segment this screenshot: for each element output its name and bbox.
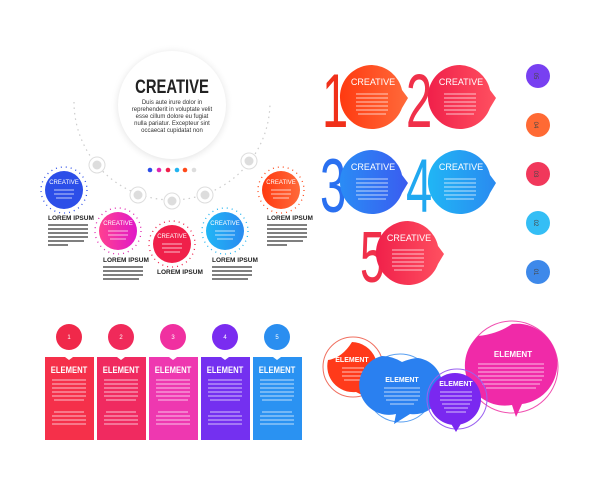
labels: LOREM IPSUM (103, 257, 149, 264)
main white circle: Duis aute irure dolor in (142, 100, 202, 106)
labels (48, 215, 313, 276)
number 1 bubble: CREATIVE (351, 77, 395, 87)
blue bubble: ELEMENT (385, 377, 419, 384)
main white circle: nulla pariatur. Excepteur sint (134, 121, 210, 127)
step circles (41, 167, 304, 267)
main white circle (110, 44, 234, 168)
panel: element speech circles (323, 321, 558, 432)
number 2 bubble: CREATIVE (439, 77, 483, 87)
number 2 bubble: 2 (406, 60, 432, 144)
panel: vertical number dots: 02 (532, 220, 538, 227)
number 1 bubble (322, 60, 408, 144)
number 3 bubble: CREATIVE (351, 162, 395, 172)
panel: vertical number dots: 01 (532, 269, 538, 276)
number 4 bubble (406, 145, 496, 229)
step circles: CREATIVE (103, 221, 133, 227)
step circles: CREATIVE (210, 221, 240, 227)
main white circle: CREATIVE (135, 76, 209, 97)
panel: element cards: ELEMENT (155, 364, 191, 375)
panel: element cards (45, 324, 302, 440)
number 3 bubble (320, 145, 408, 229)
number 3 bubble: 3 (320, 145, 346, 229)
panel: numbered creative bubbles (320, 60, 496, 298)
panel: element cards: ELEMENT (51, 364, 87, 375)
labels: LOREM IPSUM (48, 215, 94, 222)
panel: central creative circle diagram (41, 44, 313, 279)
labels: LOREM IPSUM (157, 269, 203, 276)
number 5 bubble: CREATIVE (387, 233, 431, 243)
panel: element cards: 5 (275, 335, 279, 341)
labels: LOREM IPSUM (267, 215, 313, 222)
purple bubble: ELEMENT (439, 381, 473, 388)
main white circle: occaecat cupidatat non (141, 128, 203, 134)
purple bubble (427, 369, 487, 432)
panel: element cards: ELEMENT (259, 364, 295, 375)
panel: vertical number dots: 05 (532, 73, 538, 80)
main white circle: reprehenderit in voluptate velit (132, 107, 213, 113)
panel: element cards: 1 (67, 335, 71, 341)
step circles: CREATIVE (266, 180, 296, 186)
number 4 bubble: CREATIVE (439, 162, 483, 172)
panel: vertical number dots: 04 (532, 122, 538, 129)
number 5 bubble: 5 (360, 217, 385, 298)
step circles: CREATIVE (49, 180, 79, 186)
panel: element cards: 2 (119, 335, 123, 341)
panel: element cards: 3 (171, 335, 175, 341)
panel: vertical number dots (526, 64, 550, 284)
panel: vertical number dots: 03 (532, 171, 538, 178)
number 5 bubble (360, 217, 444, 298)
panel: element cards: ELEMENT (103, 364, 139, 375)
number 1 bubble: 1 (322, 60, 348, 144)
color dots (148, 168, 196, 172)
panel: element cards: ELEMENT (207, 364, 243, 375)
number 4 bubble: 4 (406, 145, 432, 229)
pink large bubble (465, 321, 558, 417)
main white circle: esse cillum dolore eu fugiat (136, 114, 209, 120)
connector rings (89, 153, 257, 209)
number 2 bubble (406, 60, 496, 144)
blue bubble (359, 354, 442, 424)
red bubble: ELEMENT (335, 357, 369, 364)
panel: element cards: 4 (223, 335, 227, 341)
step circles: CREATIVE (157, 234, 187, 240)
pink large bubble: ELEMENT (494, 350, 532, 359)
labels: LOREM IPSUM (212, 257, 258, 264)
red bubble (323, 337, 383, 397)
